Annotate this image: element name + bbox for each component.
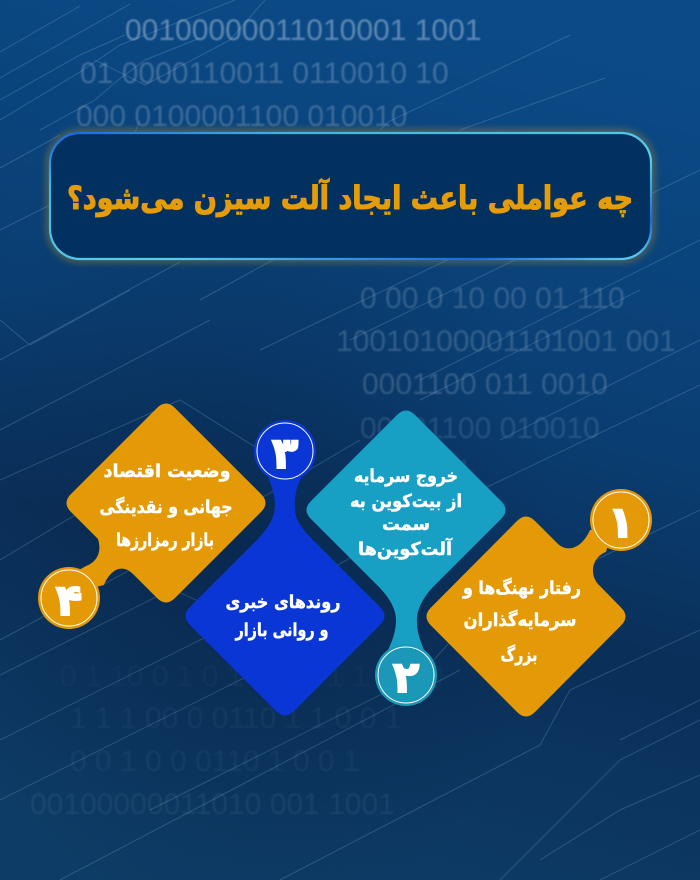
- badge 1: ۱: [608, 498, 634, 548]
- background binary digits: 0 1 10 0 1 0 1 1 0 0 1 1 0 1 0: [60, 660, 444, 693]
- title panel: [50, 133, 651, 259]
- background binary digits: 00100000011010 001 1001: [30, 788, 395, 821]
- step 4: orange diamond: [38, 404, 266, 629]
- text: step 1: [462, 577, 581, 666]
- background binary digits: 10010100001101001 001: [336, 325, 676, 358]
- text: step 3: روندهای خبری: [226, 592, 340, 613]
- text: step 2: آلت‌کوین‌ها: [358, 537, 453, 560]
- text: step 3: و روانی بازار: [235, 620, 328, 641]
- text: step 4: وضعیت اقتصاد: [104, 461, 230, 482]
- background binary digits: 00100000011010001 1001: [125, 14, 481, 47]
- text: step 2: [350, 466, 462, 560]
- badge 2: [375, 644, 437, 706]
- text: step 4: بازار رمزارزها: [116, 530, 214, 551]
- text: step 4: [100, 461, 232, 551]
- step 3: blue diamond: [186, 420, 384, 716]
- badge 3: [257, 423, 313, 479]
- text: step 2: از بیت‌کوین به: [350, 491, 462, 512]
- text: step 1: رفتار نهنگ‌ها و: [462, 577, 581, 599]
- badge 3: ۳: [272, 429, 298, 479]
- background binary digits: 000 0100001100 010010: [76, 100, 407, 133]
- text: step 1: سرمایه‌گذاران: [464, 609, 576, 631]
- badge 1: [590, 489, 652, 551]
- background binary digits: 1 1 1 00 0 0110 1 1 0 0 1: [70, 702, 401, 735]
- text: step 1: بزرگ: [500, 644, 538, 666]
- text: step 3: [226, 592, 340, 641]
- background binary digits: 0011101: [360, 454, 472, 487]
- background binary digits: 00001100 010010: [360, 412, 600, 445]
- text: step 2: خروج سرمایه: [354, 466, 458, 487]
- background binary digits: 0001100 011 0010: [362, 368, 608, 401]
- badge 2: ۲: [393, 653, 419, 703]
- text: step 4: جهانی و نقدینگی: [100, 496, 232, 518]
- background binary digits: 01 0000110011 0110010 10: [80, 57, 449, 90]
- background binary digits: 0 00 0 10 00 01 110: [360, 282, 625, 315]
- badge 4: [38, 567, 100, 629]
- badge 4: ۴: [56, 576, 82, 626]
- background binary digits: 0 0 1 0 0 0110 1 0 0 1: [70, 745, 360, 778]
- step 2: teal diamond: [306, 410, 506, 706]
- text: step 2: سمت: [382, 514, 430, 535]
- step 1: orange diamond: [426, 489, 652, 716]
